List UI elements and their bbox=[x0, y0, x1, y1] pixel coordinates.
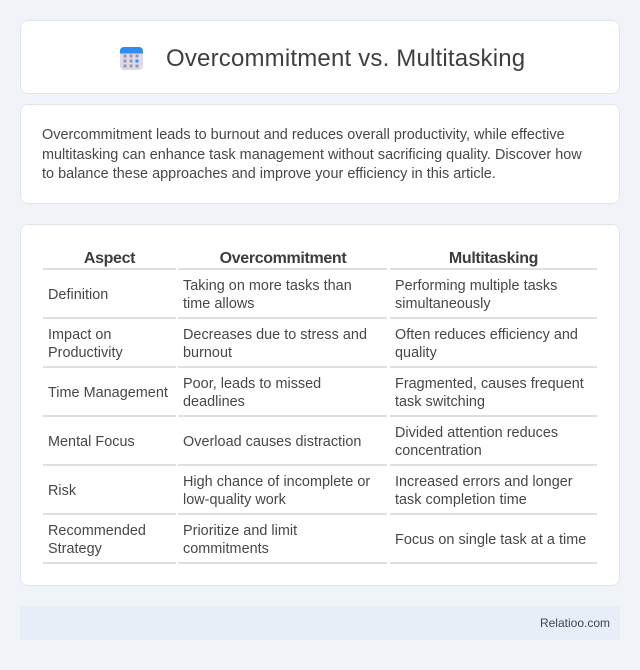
row: Time Management: Time Management bbox=[48, 385, 168, 401]
footer bar bbox=[20, 606, 620, 640]
header: Aspect: Aspect bbox=[84, 250, 135, 267]
multitasking impact bbox=[395, 327, 578, 361]
row: Risk: Risk bbox=[48, 483, 76, 499]
row: Recommended Strategy: Recommended bbox=[48, 523, 146, 539]
title card bbox=[20, 20, 620, 94]
multitasking mental focus: concentration bbox=[395, 443, 482, 459]
overcommitment impact: burnout bbox=[183, 345, 232, 361]
footer credit: Relatioo.com bbox=[540, 616, 610, 630]
intro text: multitasking can enhance task management without sacrificing quality. Discover how bbox=[42, 146, 582, 162]
overcommitment risk: High chance of incomplete or bbox=[183, 474, 370, 490]
row: Recommended Strategy: Strategy bbox=[48, 541, 102, 557]
overcommitment strategy: commitments bbox=[183, 541, 269, 557]
overcommitment mental focus: Overload causes distraction bbox=[183, 434, 361, 450]
row: Recommended Strategy bbox=[48, 523, 146, 557]
overcommitment impact bbox=[183, 327, 367, 361]
multitasking time management: Fragmented, causes frequent bbox=[395, 376, 584, 392]
intro card bbox=[20, 104, 620, 204]
multitasking risk: Increased errors and longer bbox=[395, 474, 573, 490]
overcommitment time management: Poor, leads to missed bbox=[183, 376, 321, 392]
table card bbox=[20, 224, 620, 586]
intro text: Overcommitment leads to burnout and reduces overall productivity, while effective bbox=[42, 127, 565, 143]
title: Overcommitment vs. Multitasking bbox=[166, 45, 525, 72]
header: Overcommitment: Overcommitment bbox=[220, 250, 346, 267]
intro text: to balance these approaches and improve your efficiency in this article. bbox=[42, 166, 496, 182]
overcommitment definition bbox=[183, 278, 352, 312]
overcommitment time management: deadlines bbox=[183, 394, 245, 410]
multitasking definition: Performing multiple tasks bbox=[395, 278, 557, 294]
multitasking risk bbox=[395, 474, 573, 508]
overcommitment strategy: Prioritize and limit bbox=[183, 523, 297, 539]
overcommitment risk: low-quality work bbox=[183, 492, 286, 508]
overcommitment definition: Taking on more tasks than bbox=[183, 278, 352, 294]
multitasking definition: simultaneously bbox=[395, 296, 491, 312]
multitasking definition bbox=[395, 278, 557, 312]
intro text bbox=[42, 127, 582, 182]
overcommitment strategy bbox=[183, 523, 298, 557]
header: Multitasking: Multitasking bbox=[449, 250, 538, 267]
multitasking time management: task switching bbox=[395, 394, 485, 410]
row: Impact on Productivity: Impact on bbox=[48, 327, 111, 343]
multitasking impact: Often reduces efficiency and bbox=[395, 327, 578, 343]
row: Impact on Productivity: Productivity bbox=[48, 345, 123, 361]
row: Definition: Definition bbox=[48, 287, 108, 303]
overcommitment impact: Decreases due to stress and bbox=[183, 327, 367, 343]
multitasking time management bbox=[395, 376, 584, 410]
row: Mental Focus: Mental Focus bbox=[48, 434, 135, 450]
multitasking risk: task completion time bbox=[395, 492, 527, 508]
multitasking mental focus: Divided attention reduces bbox=[395, 425, 558, 441]
overcommitment time management bbox=[183, 376, 321, 410]
multitasking strategy: Focus on single task at a time bbox=[395, 532, 586, 548]
overcommitment risk bbox=[183, 474, 370, 508]
multitasking impact: quality bbox=[395, 345, 437, 361]
icon: calendar bbox=[120, 47, 143, 70]
overcommitment definition: time allows bbox=[183, 296, 255, 312]
row: Impact on Productivity bbox=[48, 327, 123, 361]
multitasking mental focus bbox=[395, 425, 558, 459]
